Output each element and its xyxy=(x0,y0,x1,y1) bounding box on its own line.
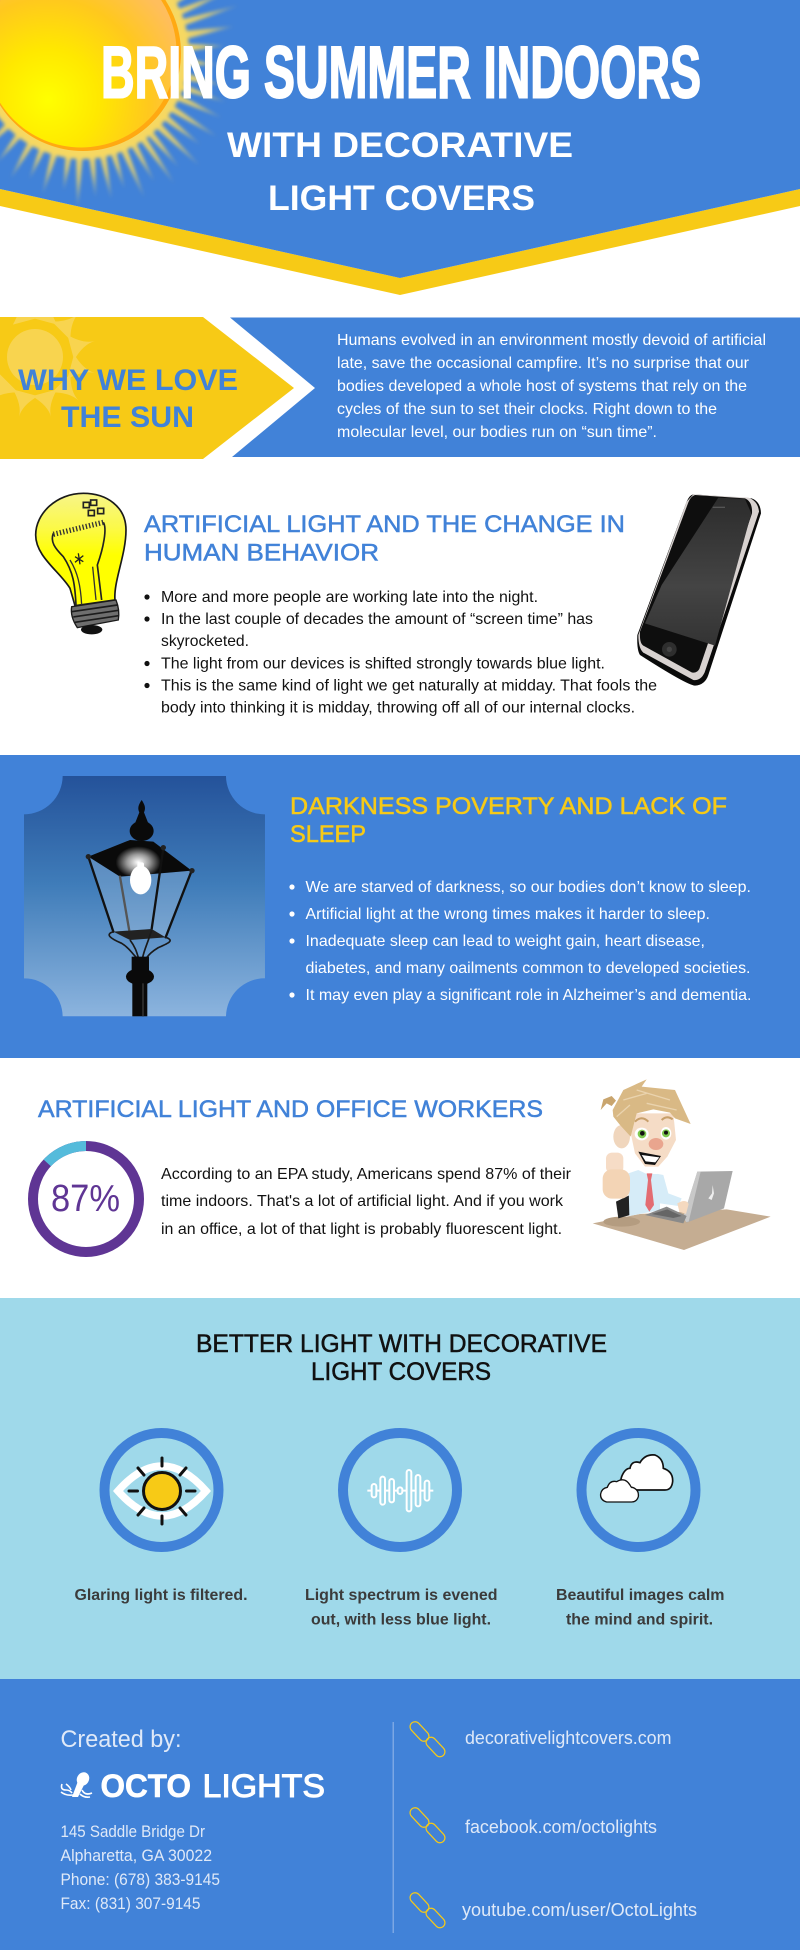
bullet list: We are starved of darkness, so our bodies don’t know to sleep. xyxy=(306,879,751,896)
bullet list: The light from our devices is shifted strongly towards blue light. xyxy=(161,656,605,672)
heading xyxy=(144,511,625,566)
bullet list: This is the same kind of light we get naturally at midday. That fools the xyxy=(161,678,657,694)
heading: THE SUN xyxy=(61,401,194,434)
logo: octo lights: OCTO xyxy=(100,1768,191,1804)
icon: light spectrum waveform xyxy=(343,1433,457,1547)
bullet list: Inadequate sleep can lead to weight gain, heart disease, xyxy=(306,933,705,950)
intro paragraph: cycles of the sun to set their clocks. Right down to the xyxy=(337,401,717,418)
bullet list: skyrocketed. xyxy=(161,633,249,650)
panel: darkness poverty xyxy=(0,755,800,1058)
bullet list: In the last couple of decades the amount of “screen time” has xyxy=(161,611,593,628)
paragraph xyxy=(161,1166,572,1238)
paragraph: According to an EPA study, Americans spend 87% of their xyxy=(161,1166,572,1183)
address: Fax: (831) 307-9145 xyxy=(60,1894,200,1913)
icon: eye with sun xyxy=(104,1433,218,1547)
subtitle: WITH DECORATIVE xyxy=(227,126,573,165)
donut chart 87% xyxy=(33,1146,139,1252)
logo: octo lights: LIGHTS xyxy=(202,1768,325,1804)
heading: LIGHT COVERS xyxy=(311,1358,491,1386)
bullet list xyxy=(289,879,752,1004)
panel: footer xyxy=(0,1679,800,1950)
donut chart 87%: 87% xyxy=(51,1178,120,1220)
intro paragraph: Humans evolved in an environment mostly devoid of artificial xyxy=(337,332,766,349)
icon: sun xyxy=(0,0,239,208)
intro paragraph: molecular level, our bodies run on “sun time”. xyxy=(337,424,657,441)
link: youtube xyxy=(408,1891,697,1930)
yellow arrow with sun motif xyxy=(0,317,294,459)
link: website: decorativelightcovers.com xyxy=(465,1728,672,1748)
panel: office workers xyxy=(33,1079,771,1252)
heading: DARKNESS POVERTY AND LACK OF xyxy=(290,793,727,820)
heading: WHY WE LOVE xyxy=(18,364,238,397)
captions: Light spectrum is evened xyxy=(305,1587,498,1604)
icon: light bulb xyxy=(36,493,126,634)
address: 145 Saddle Bridge Dr xyxy=(60,1822,205,1841)
illustration: office worker at laptop xyxy=(593,1079,771,1250)
heading: HUMAN BEHAVIOR xyxy=(144,540,379,566)
bullet list: body into thinking it is midday, throwing off all of our internal clocks. xyxy=(161,700,635,716)
address: Alpharetta, GA 30022 xyxy=(60,1846,212,1865)
panel: why we love the sun xyxy=(0,317,800,459)
captions: out, with less blue light. xyxy=(311,1612,491,1628)
intro paragraph: late, save the occasional campfire. It’s no surprise that our xyxy=(337,355,750,372)
bullet list: More and more people are working late into the night. xyxy=(161,589,538,606)
link: facebook xyxy=(408,1806,657,1845)
captions: Beautiful images calm xyxy=(556,1587,724,1604)
captions: the mind and spirit. xyxy=(566,1612,713,1628)
heading: SLEEP xyxy=(290,821,366,848)
panel: better light xyxy=(0,1298,800,1679)
link: facebook: facebook.com/octolights xyxy=(465,1817,657,1837)
bullet list xyxy=(144,589,657,716)
heading xyxy=(290,793,727,848)
heading: BETTER LIGHT WITH DECORATIVE xyxy=(196,1330,607,1358)
intro paragraph xyxy=(337,332,766,441)
captions xyxy=(74,1587,724,1628)
icon: smartphone xyxy=(637,494,761,686)
panel: artificial light and behavior xyxy=(36,493,761,716)
heading: ARTIFICIAL LIGHT AND OFFICE WORKERS xyxy=(38,1096,543,1123)
header banner xyxy=(0,0,800,295)
heading: ARTIFICIAL LIGHT AND THE CHANGE IN xyxy=(144,511,625,538)
logo: octo lights xyxy=(61,1768,325,1804)
bullet list: diabetes, and many oailments common to developed societies. xyxy=(306,960,750,977)
image: street lamp xyxy=(24,776,265,1016)
paragraph: time indoors. That's a lot of artificial light. And if you work xyxy=(161,1193,564,1210)
heading xyxy=(196,1330,607,1386)
intro paragraph: bodies developed a whole host of systems that rely on the xyxy=(337,378,747,395)
bullet list: It may even play a significant role in Alzheimer’s and dementia. xyxy=(306,987,752,1004)
heading xyxy=(18,364,238,434)
paragraph: in an office, a lot of that light is probably fluorescent light. xyxy=(161,1221,562,1238)
created by: Created by: xyxy=(60,1726,182,1753)
bullet list: Artificial light at the wrong times makes it harder to sleep. xyxy=(306,906,710,923)
link: website xyxy=(408,1720,672,1759)
address: Phone: (678) 383-9145 xyxy=(60,1870,220,1889)
subtitle: LIGHT COVERS xyxy=(268,179,535,218)
captions: Glaring light is filtered. xyxy=(74,1587,248,1604)
icon: clouds xyxy=(582,1433,696,1547)
link: youtube: youtube.com/user/OctoLights xyxy=(462,1900,697,1920)
subtitle xyxy=(227,126,573,218)
address xyxy=(60,1822,220,1913)
